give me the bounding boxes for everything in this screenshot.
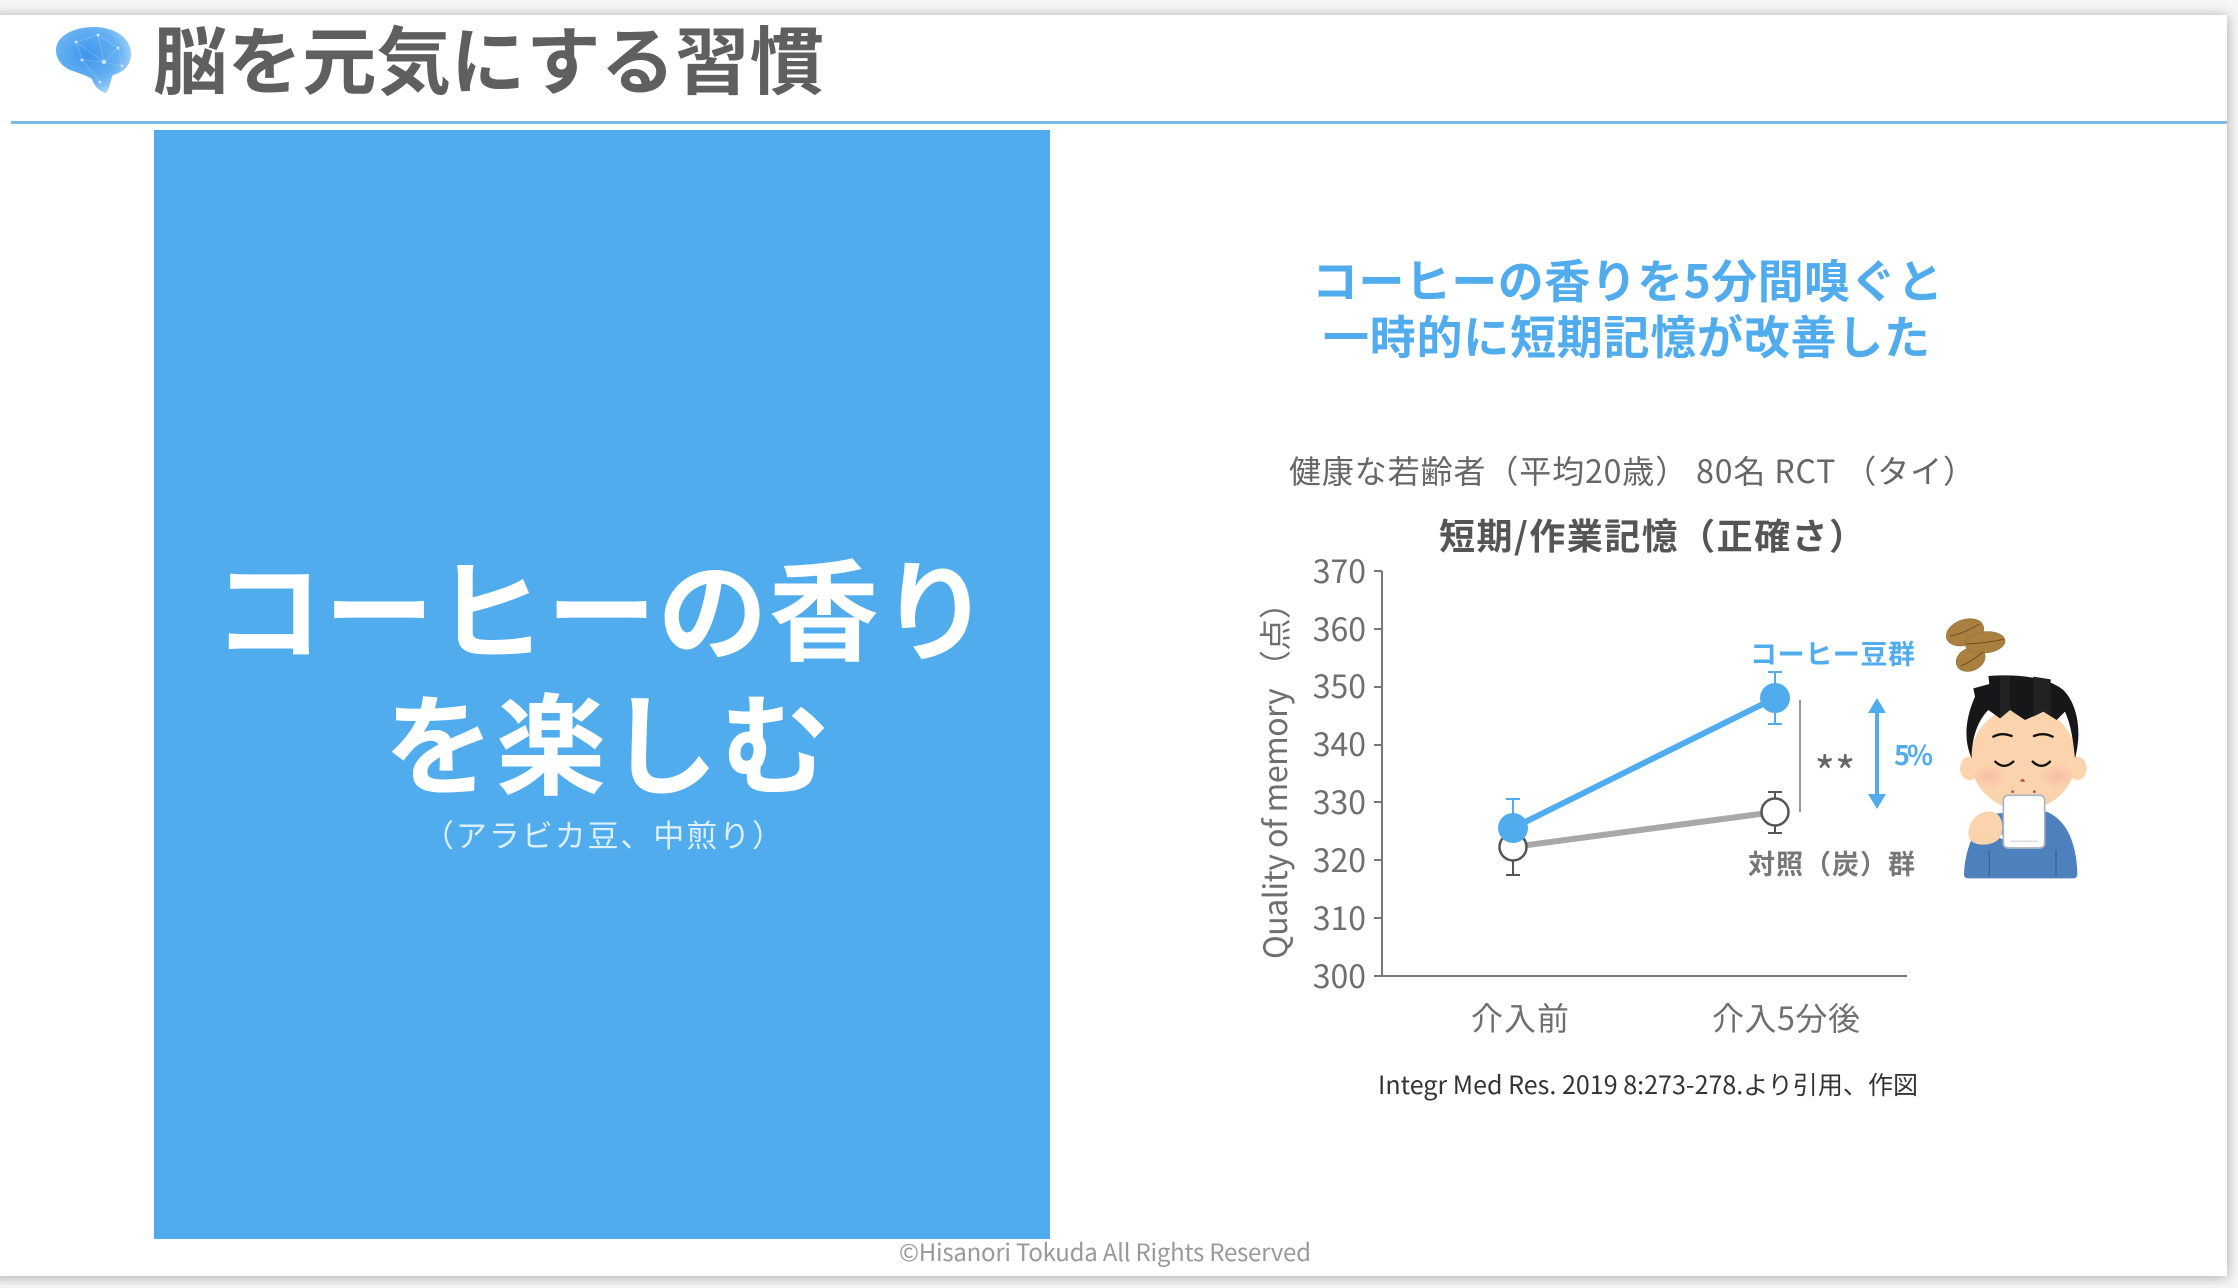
x axis labels: 介入前	[1471, 994, 1569, 1040]
hair	[1966, 675, 2078, 758]
sub message: （アラビカ豆、中煎り）	[423, 811, 783, 856]
shirt	[1964, 812, 2077, 878]
label: coffee group: コーヒー豆群	[1750, 633, 1915, 672]
hand	[1968, 811, 2002, 845]
eyebrows and eyes	[1993, 734, 2053, 766]
y axis: 330	[1313, 778, 1366, 824]
mug	[2003, 795, 2045, 848]
y axis: 350	[1313, 662, 1366, 708]
main message: コーヒーの香り	[213, 524, 990, 684]
main message	[213, 524, 990, 818]
x axis labels: 介入5分後	[1712, 994, 1860, 1040]
illustration: person drinking coffee	[1960, 675, 2087, 878]
footer copyright: ©Hisanori Tokuda All Rights Reserved	[899, 1233, 1311, 1268]
chart title: 短期/作業記憶（正確さ）	[1439, 508, 1865, 560]
series: coffee	[1498, 672, 1790, 843]
y axis: 360	[1313, 605, 1366, 651]
y axis: 320	[1313, 836, 1366, 882]
y axis: 310	[1313, 894, 1366, 940]
nose and mouth	[2020, 778, 2025, 782]
blush	[1972, 763, 2007, 789]
x axis labels	[1471, 994, 1860, 1040]
line chart	[1251, 547, 1933, 1040]
label: 5 percent: 5%	[1894, 734, 1933, 773]
y axis label: Quality of memory （点）	[1251, 587, 1297, 959]
y axis: 340	[1313, 720, 1366, 766]
heading: finding: 一時的に短期記憶が改善した	[1323, 302, 1930, 368]
citation: Integr Med Res. 2019 8:273-278.より引用、作図	[1378, 1066, 1918, 1102]
main message: を楽しむ	[384, 658, 830, 818]
series: control	[1500, 792, 1788, 875]
y axis: 370	[1313, 547, 1366, 593]
face	[1971, 707, 2076, 810]
heading: finding: コーヒーの香りを5分間嗅ぐと	[1312, 246, 1943, 312]
arrow: difference	[1868, 698, 1886, 809]
header rule	[11, 121, 2227, 124]
ears	[1960, 757, 1979, 780]
mug handle	[1991, 807, 2005, 838]
significance	[1800, 700, 1856, 812]
icon: brain	[56, 27, 131, 93]
significance: **	[1814, 738, 1856, 802]
y axis: 300	[1313, 952, 1366, 998]
y axis	[1313, 547, 1907, 998]
study description: 健康な若齢者（平均20歳） 80名 RCT （タイ）	[1289, 447, 1975, 493]
panel: blue message	[154, 130, 1050, 1239]
heading: finding	[1312, 246, 1943, 368]
icon: coffee beans	[1942, 614, 2006, 676]
title: 脳を元気にする習慣	[153, 3, 824, 110]
label: control group: 対照（炭）群	[1748, 843, 1915, 882]
